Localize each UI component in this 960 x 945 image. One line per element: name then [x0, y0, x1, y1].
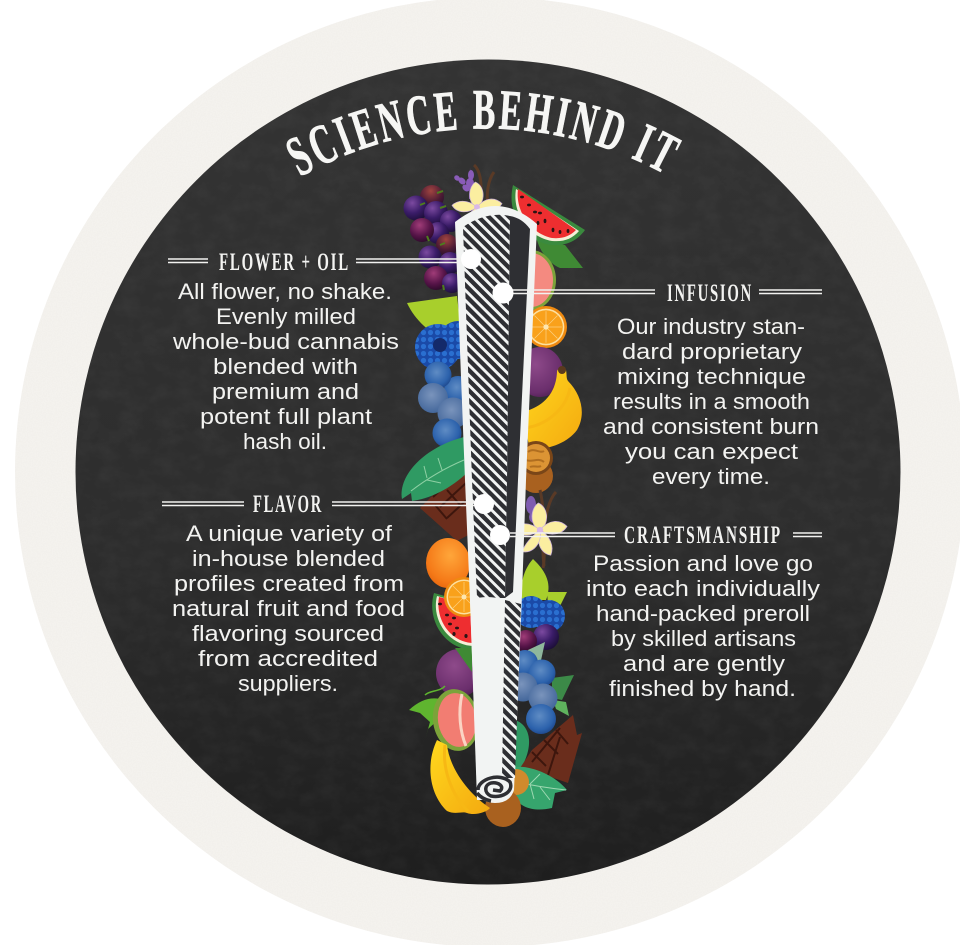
- icon: plum: [517, 347, 563, 397]
- icon: guava: [506, 250, 556, 310]
- text block: you can expect: [625, 439, 799, 464]
- callout: craftsmanship: [490, 522, 822, 701]
- text block: All flower, no shake.: [178, 279, 392, 304]
- icon: orange slice: [525, 306, 567, 348]
- text block: [586, 551, 821, 701]
- heading: craftsmanship: CRAFTSMANSHIP: [624, 522, 782, 549]
- callout: flavor: [162, 491, 494, 696]
- text block: and consistent burn: [603, 414, 819, 439]
- text block: premium and: [212, 379, 359, 404]
- icon: green leaf: [402, 437, 470, 501]
- icon: lime leaves right: [521, 559, 567, 610]
- icon: dark grapes: [404, 185, 462, 293]
- icon: walnut bottom: [485, 769, 529, 827]
- marker dot: [474, 494, 494, 514]
- marker dot: [490, 525, 510, 545]
- text block: from accredited: [198, 646, 378, 671]
- text block: [172, 279, 399, 454]
- text block: into each individually: [586, 576, 821, 601]
- icon: blueberries: [418, 362, 472, 448]
- callout: infusion: [492, 280, 822, 489]
- icon: lime leaf: [407, 296, 462, 340]
- marker dot: [492, 282, 514, 304]
- text block: hand-packed preroll: [596, 601, 810, 626]
- icon: walnut: [519, 441, 553, 493]
- text block: profiles created from: [174, 571, 404, 596]
- text block: in-house blended: [192, 546, 385, 571]
- marker dot: [461, 249, 481, 269]
- text block: mixing technique: [617, 364, 806, 389]
- text block: suppliers.: [238, 671, 338, 696]
- chalkboard circle: [76, 60, 900, 884]
- icon: watermelon slice: [512, 185, 585, 245]
- icon: banana left: [430, 740, 490, 814]
- icon: orange slice left: [444, 577, 484, 617]
- title: SCIENCE BEHIND IT: [286, 90, 682, 176]
- icon: watermelon left: [432, 593, 474, 650]
- text block: Our industry stan-: [617, 314, 805, 339]
- icon: raspberries and dark grapes right: [515, 596, 565, 652]
- text block: results in a smooth: [613, 389, 810, 414]
- text block: [172, 521, 405, 696]
- icon: plum left: [436, 649, 482, 697]
- callout: flower + oil: [168, 249, 481, 454]
- striped filling upper: [463, 215, 510, 598]
- preroll joint illustration: [455, 206, 537, 803]
- text block: and are gently: [623, 651, 786, 676]
- white paper lower: [470, 597, 505, 800]
- text block: whole-bud cannabis: [172, 329, 399, 354]
- text block: hash oil.: [243, 429, 327, 454]
- text block: by skilled artisans: [611, 626, 796, 651]
- text block: [603, 314, 819, 489]
- text block: A unique variety of: [186, 521, 393, 546]
- icon: banana: [522, 366, 582, 450]
- heading: flower + oil: FLOWER + OIL: [219, 249, 350, 276]
- icon: striped leaves: [537, 240, 583, 268]
- icon: orange fruit: [426, 538, 470, 588]
- joint outer wrapper: [455, 206, 537, 803]
- text block: potent full plant: [200, 404, 373, 429]
- text block: every time.: [652, 464, 770, 489]
- icon: guava left with leaves: [409, 686, 483, 754]
- icon: chocolate bar right: [520, 715, 582, 783]
- dark band upper: [505, 216, 530, 598]
- text block: flavoring sourced: [192, 621, 384, 646]
- icon: chocolate bar: [420, 468, 478, 541]
- text block: blended with: [213, 354, 358, 379]
- striped filling lower: [502, 600, 521, 778]
- text block: natural fruit and food: [172, 596, 405, 621]
- joint spiral end: [477, 777, 511, 801]
- heading: flavor: FLAVOR: [253, 491, 323, 518]
- icon: vanilla pods and lavender top: [452, 165, 502, 230]
- text block: Passion and love go: [593, 551, 813, 576]
- fruit column illustration: [402, 165, 585, 827]
- text block: dard proprietary: [622, 339, 803, 364]
- icon: small teal leaf: [510, 720, 529, 770]
- text block: Evenly milled: [216, 304, 356, 329]
- text block: finished by hand.: [609, 676, 796, 701]
- heading: infusion: INFUSION: [667, 280, 753, 307]
- icon: vanilla pods and flower middle: [513, 490, 567, 568]
- icon: lower green leaf: [515, 767, 567, 810]
- icon: striped leaf left: [455, 648, 472, 672]
- icon: blueberries right: [508, 642, 574, 734]
- icon: raspberries: [415, 321, 477, 370]
